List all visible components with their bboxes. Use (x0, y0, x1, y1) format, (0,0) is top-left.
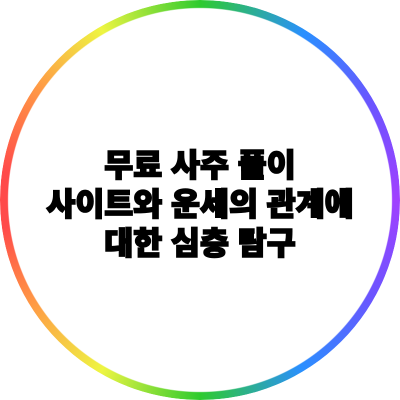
title (46, 147, 354, 261)
title: 대한 심층 탐구 (104, 225, 296, 261)
title: 사이트와 운세의 관계에 (46, 186, 354, 222)
title: 무료 사주 풀이 (104, 147, 296, 183)
